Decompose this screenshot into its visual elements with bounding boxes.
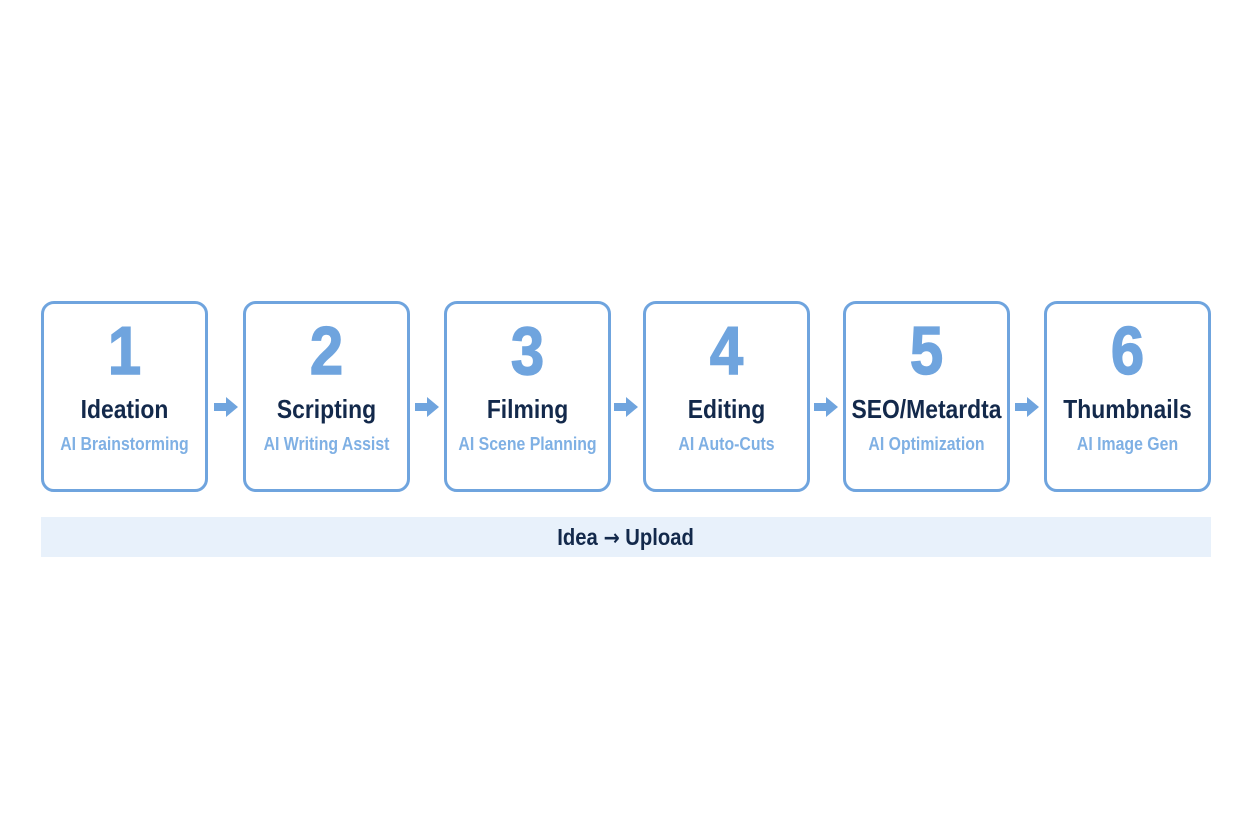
step 2 box: Scripting: [277, 394, 376, 424]
step 5 box: 5: [910, 313, 943, 389]
step 2 box: AI Writing Assist: [264, 434, 389, 454]
step 3 box: 3: [511, 313, 544, 389]
step 2 box: 2: [310, 313, 343, 389]
step 3 box: [444, 301, 611, 492]
step 6 box: AI Image Gen: [1077, 434, 1178, 454]
arrow 3: [614, 397, 638, 417]
step 1 box: 1: [108, 313, 141, 389]
step 4 box: [643, 301, 810, 492]
step 1 box: AI Brainstorming: [60, 434, 189, 454]
step 6 box: 6: [1111, 313, 1144, 389]
arrow 1: [214, 397, 238, 417]
arrow 4: [814, 397, 838, 417]
step 3 box: AI Scene Planning: [458, 434, 597, 454]
step 5 box: AI Optimization: [868, 434, 985, 454]
arrow 5: [1015, 397, 1039, 417]
step 3 box: Filming: [487, 394, 568, 424]
step 5 box: SEO/Metardta: [851, 394, 1002, 424]
arrow 2: [415, 397, 439, 417]
step 4 box: AI Auto-Cuts: [678, 434, 775, 454]
step 1 box: [41, 301, 208, 492]
step 5 box: [843, 301, 1010, 492]
step 6 box: Thumbnails: [1063, 394, 1192, 424]
bottom bar: Idea to Upload: Idea → Upload: [558, 524, 694, 551]
step 4 box: Editing: [688, 394, 765, 424]
step 1 box: Ideation: [81, 394, 168, 424]
step 6 box: [1044, 301, 1211, 492]
bottom bar: Idea to Upload: [41, 517, 1211, 557]
step 2 box: [243, 301, 410, 492]
step 4 box: 4: [710, 313, 743, 389]
